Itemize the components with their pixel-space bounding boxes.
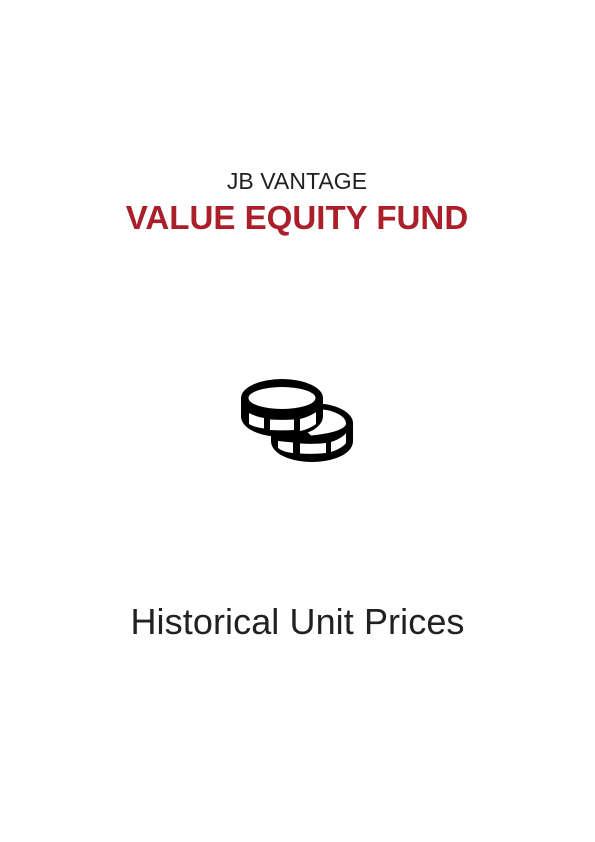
heading: Historical Unit Prices: Historical Unit Prices [130, 601, 465, 642]
bottom coin [271, 403, 353, 462]
top coin [241, 379, 323, 437]
title: Value Equity Fund: VALUE EQUITY FUND [126, 200, 468, 237]
subtitle: JB Vantage: JB VANTAGE [227, 168, 367, 194]
